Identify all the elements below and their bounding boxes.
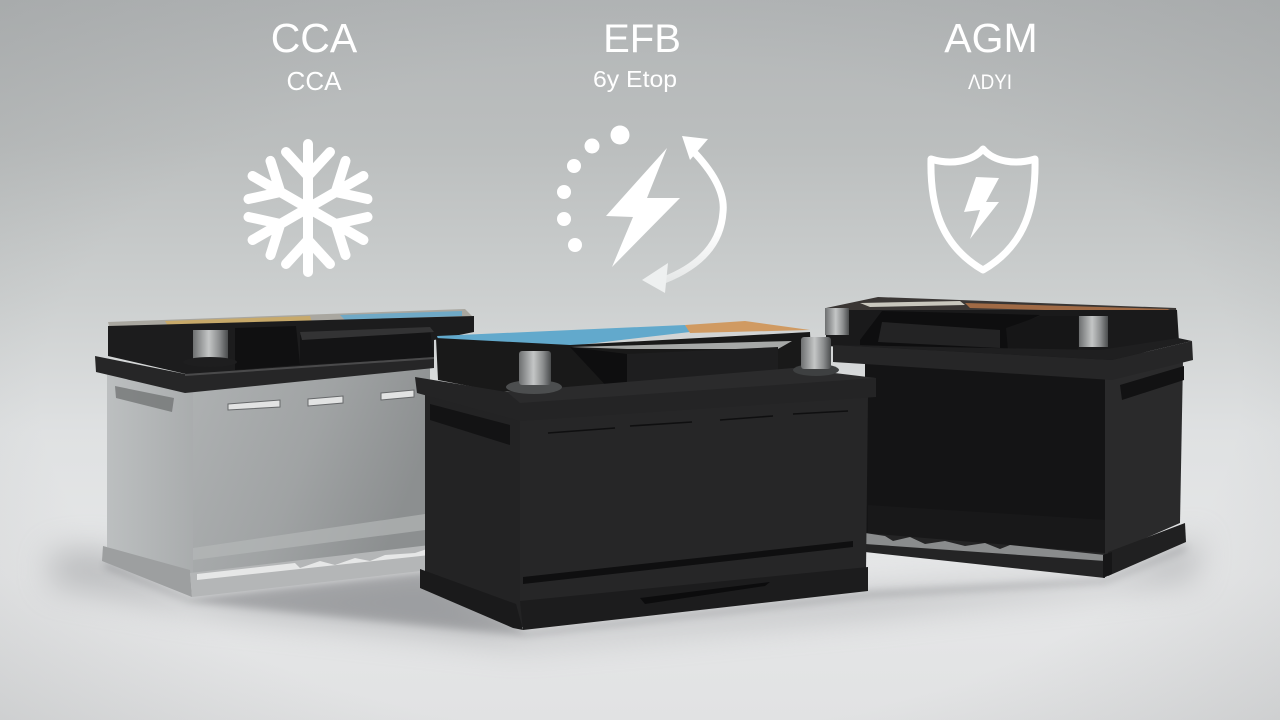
terminal posts — [825, 308, 849, 335]
left face — [425, 390, 524, 628]
top label: blue — [437, 325, 690, 346]
case lip — [833, 341, 1193, 380]
column: AGM — [931, 15, 1038, 270]
centre lid — [860, 311, 1040, 350]
heading: CCA: CCA — [271, 15, 358, 61]
centre lid — [570, 341, 792, 349]
column: EFB — [557, 17, 723, 293]
subheading: AGM: ΛDYI — [968, 71, 1012, 94]
icon: shield with bolt — [931, 149, 1035, 270]
battery: CCA (left, silver) — [95, 309, 474, 597]
column: CCA — [242, 15, 374, 272]
case lip — [415, 372, 876, 421]
front face — [520, 395, 868, 604]
dots — [557, 126, 630, 252]
subheading: CCA: CCA — [287, 66, 342, 96]
base — [102, 546, 192, 597]
top block — [826, 310, 1179, 362]
front face — [193, 368, 430, 576]
embossed marks — [548, 411, 848, 433]
floor shadows — [50, 535, 1200, 645]
heading: EFB: EFB — [603, 17, 681, 61]
front face — [865, 362, 1107, 556]
heading: AGM: AGM — [944, 15, 1038, 61]
side recess — [430, 404, 510, 445]
top label — [108, 309, 474, 330]
right face — [1105, 360, 1183, 556]
battery: AGM (right, black) — [825, 297, 1193, 578]
base — [520, 567, 868, 630]
top block — [436, 332, 812, 392]
terminal post — [183, 330, 237, 367]
terminal posts — [506, 337, 839, 394]
base — [865, 533, 1105, 578]
battery: EFB (centre, black) — [415, 321, 876, 630]
icon: snowflake — [242, 144, 374, 272]
top block — [108, 316, 474, 375]
lightning bolt — [606, 148, 680, 267]
case lip — [95, 356, 434, 393]
clips — [1120, 366, 1184, 400]
top label: orange — [685, 321, 810, 333]
left face — [107, 372, 195, 575]
subheading: start-stop: 6y Etop — [593, 66, 677, 92]
icon: start-stop charge — [557, 126, 723, 293]
side clips — [115, 386, 174, 412]
groove — [523, 541, 853, 584]
front clips — [228, 390, 414, 410]
top label — [826, 297, 1177, 316]
circular arrow — [642, 136, 723, 293]
